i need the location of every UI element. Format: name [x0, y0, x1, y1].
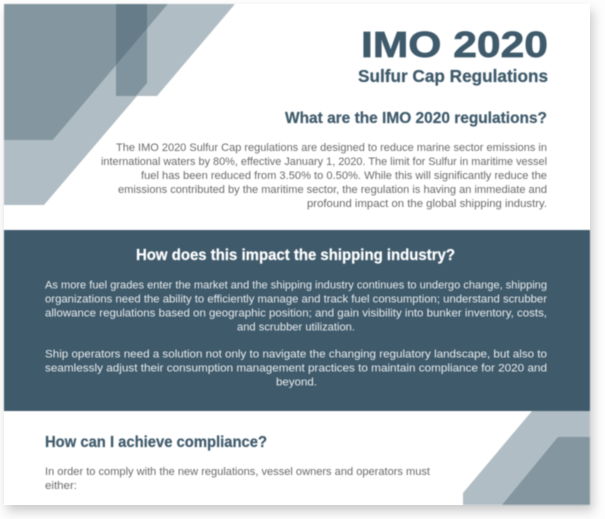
- panel: shipping industry impact: [4, 230, 590, 411]
- text block: first impact paragraph: allowance regulations based on geographic position; and gain visibility into bunker inventory, costs,: [45, 308, 547, 320]
- text block: second impact paragraph: Ship operators need a solution not only to navigate the changing regulatory landscape, but also to: [45, 348, 547, 360]
- heading: what are the regulations: What are the IMO 2020 regulations?: [285, 110, 547, 127]
- title: Sulfur Cap Regulations: [358, 66, 548, 86]
- decorative geometric shapes: bottom right: [463, 411, 590, 505]
- text block: regulations description: [101, 142, 547, 210]
- text block: regulations description: The IMO 2020 Sulfur Cap regulations are designed to reduce marine sector emissions in: [116, 142, 547, 154]
- text block: second impact paragraph: seamlessly adjust their consumption management practices to maintain compliance for 2020 and: [45, 362, 547, 374]
- text block: compliance intro: [45, 466, 431, 492]
- text block: first impact paragraph: As more fuel grades enter the market and the shipping industry continues to undergo change, shipping: [45, 280, 547, 292]
- text block: first impact paragraph: [45, 280, 547, 334]
- text block: compliance intro: either:: [45, 480, 77, 492]
- title: IMO 2020: [361, 24, 548, 65]
- decorative geometric shapes: top left: [4, 4, 235, 205]
- text block: regulations description: international waters by 80%, effective January 1, 2020. The limit for Sulfur in maritime vessel: [101, 156, 547, 168]
- text block: first impact paragraph: organizations need the ability to efficiently manage and track fuel consumption; understand scrubber: [45, 294, 547, 306]
- text block: second impact paragraph: beyond.: [276, 376, 317, 388]
- text block: first impact paragraph: and scrubber utilization.: [237, 322, 355, 334]
- title: [358, 24, 548, 86]
- heading: impact: How does this impact the shipping industry?: [136, 247, 455, 264]
- text block: regulations description: emissions contributed by the maritime sector, the regulation is having an immediate and: [118, 184, 547, 196]
- heading: compliance: How can I achieve compliance?: [45, 434, 267, 451]
- text block: second impact paragraph: [45, 348, 547, 388]
- text block: regulations description: fuel has been reduced from 3.50% to 0.50%. While this will significantly reduce the: [141, 170, 547, 182]
- text block: compliance intro: In order to comply with the new regulations, vessel owners and operators must: [45, 466, 431, 478]
- text block: regulations description: profound impact on the global shipping industry.: [307, 198, 547, 210]
